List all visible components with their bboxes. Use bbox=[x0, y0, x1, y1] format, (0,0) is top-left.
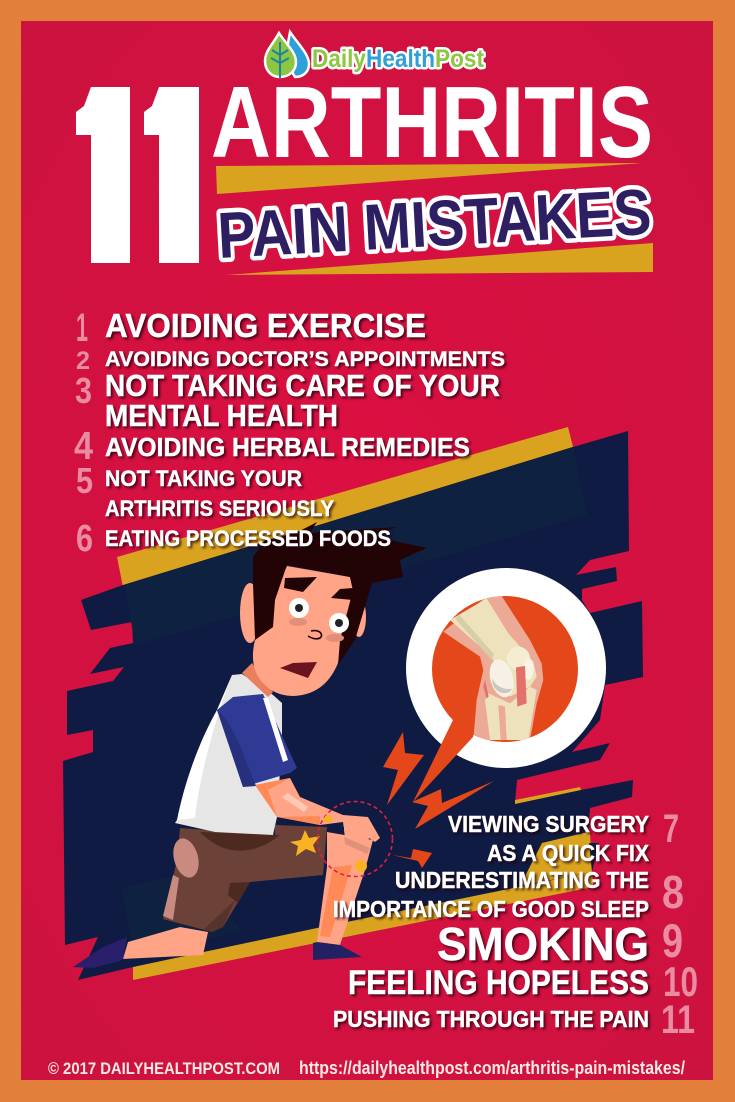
list items 1-6: AVOIDING HERBAL REMEDIES bbox=[105, 432, 470, 462]
list items 7-11: FEELING HOPELESS bbox=[348, 964, 649, 1002]
list numbers 7-11: 10 bbox=[663, 958, 698, 1005]
decorative gold bars around subtitle bbox=[216, 163, 653, 275]
back leg and shoe bbox=[73, 927, 208, 968]
speech bubble with knee joint illustration bbox=[406, 568, 606, 802]
list items 7-11: PUSHING THROUGH THE PAIN bbox=[333, 1006, 649, 1032]
list items 1-6: EATING PROCESSED FOODS bbox=[105, 526, 391, 551]
list items 7-11 bbox=[333, 811, 650, 1032]
list numbers 7-11: 8 bbox=[662, 866, 684, 918]
list items 1-6: AVOIDING EXERCISE bbox=[105, 307, 426, 344]
pain marker: dashed circle and dots bbox=[318, 802, 392, 876]
background graphic: gold band and navy brush shape bbox=[63, 427, 643, 980]
list numbers 7-11: 7 bbox=[663, 807, 679, 851]
footer: source URL: https://dailyhealthpost.com/arthritis-pain-mistakes/ bbox=[299, 1058, 685, 1078]
list items 1-6: AVOIDING DOCTOR’S APPOINTMENTS bbox=[105, 347, 505, 371]
icon: pain lightning bolts bbox=[383, 732, 494, 868]
list items 7-11: AS A QUICK FIX bbox=[487, 840, 650, 866]
list numbers 1-6: 3 bbox=[75, 370, 92, 411]
neck bbox=[242, 663, 273, 697]
list items 7-11: UNDERESTIMATING THE bbox=[395, 867, 649, 893]
head bbox=[240, 522, 427, 696]
shirt bbox=[175, 674, 282, 835]
list numbers 7-11 bbox=[661, 807, 698, 1042]
logo: DailyHealthPost bbox=[265, 32, 485, 78]
eyes bbox=[289, 598, 349, 642]
eyebrows bbox=[284, 577, 353, 600]
list numbers 1-6 bbox=[74, 306, 93, 560]
list items 1-6: NOT TAKING YOUR bbox=[105, 466, 302, 491]
list items 1-6: ARTHRITIS SERIOUSLY bbox=[105, 496, 334, 521]
subtitle: PAIN MISTAKES: PAIN MISTAKES bbox=[216, 175, 653, 272]
sleeve bbox=[217, 694, 297, 787]
list numbers 1-6: 1 bbox=[76, 306, 88, 350]
list items 1-6 bbox=[105, 307, 505, 551]
list items 7-11: IMPORTANCE OF GOOD SLEEP bbox=[333, 896, 649, 922]
list numbers 7-11: 9 bbox=[662, 914, 683, 967]
list numbers 1-6: 2 bbox=[76, 347, 90, 375]
shoulder star patch bbox=[290, 830, 320, 856]
list numbers 1-6: 5 bbox=[76, 460, 93, 501]
title: big number 11: 11 bbox=[70, 32, 208, 318]
nose bbox=[308, 631, 322, 639]
list items 7-11: SMOKING bbox=[437, 918, 649, 970]
footer: copyright: © 2017 DAILYHEALTHPOST.COM bbox=[48, 1059, 280, 1078]
list numbers 7-11: 11 bbox=[661, 998, 695, 1042]
title: ARTHRITIS: ARTHRITIS bbox=[211, 67, 653, 179]
mouth bbox=[280, 662, 317, 678]
logo: DailyHealthPost: DailyHealthPost bbox=[312, 45, 485, 73]
list items 7-11: VIEWING SURGERY bbox=[448, 811, 649, 837]
list items 1-6: NOT TAKING CARE OF YOUR bbox=[105, 368, 500, 403]
arm and hand bbox=[255, 778, 380, 854]
knee joint bbox=[443, 596, 543, 740]
list numbers 1-6: 6 bbox=[76, 518, 93, 560]
front leg and shoe bbox=[313, 832, 373, 960]
shorts bbox=[163, 825, 327, 932]
list numbers 1-6: 4 bbox=[74, 425, 93, 468]
list items 1-6: MENTAL HEALTH bbox=[105, 398, 338, 433]
character: man holding his painful knee bbox=[73, 522, 427, 968]
